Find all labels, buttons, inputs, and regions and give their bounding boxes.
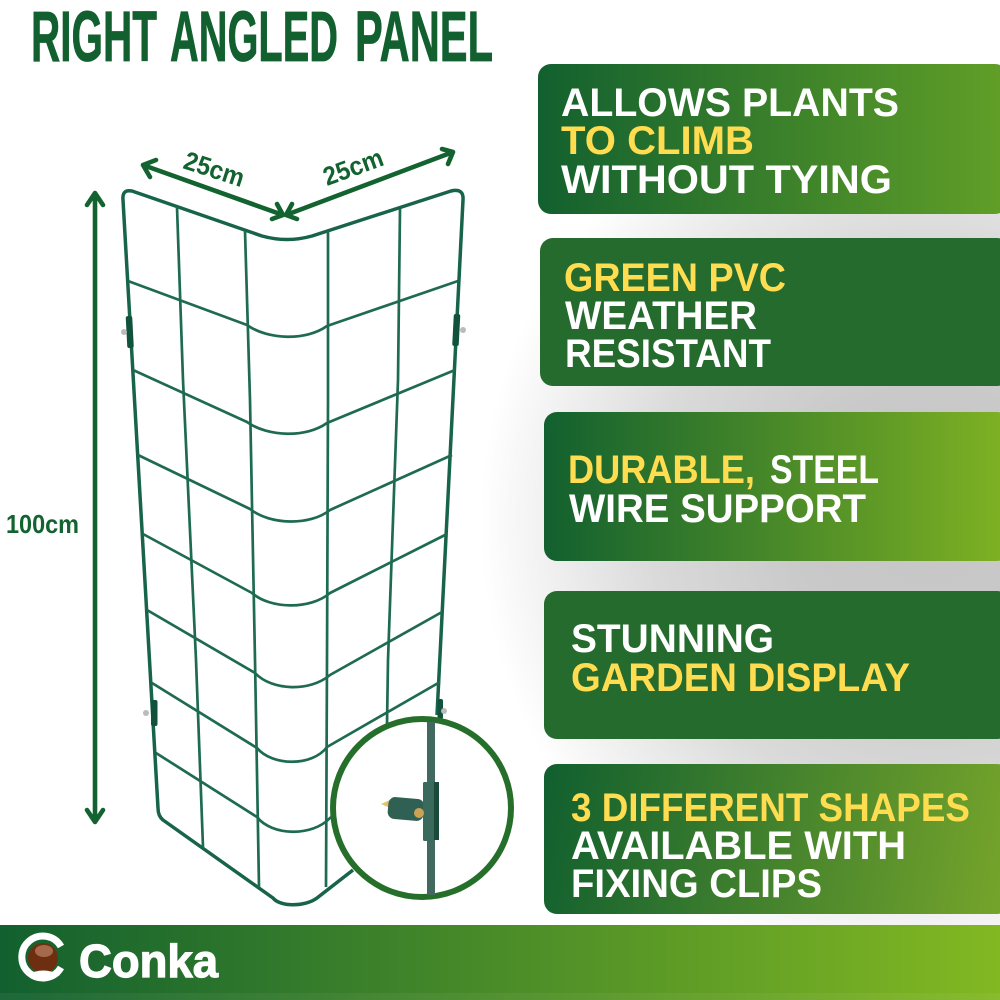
clip body xyxy=(423,782,439,841)
dimension: 25cm left xyxy=(143,145,283,219)
dimension: 100cm height: 100cm xyxy=(6,509,79,539)
panel: 3 different shapes: 3 DIFFERENT SHAPES xyxy=(571,786,970,830)
logo icon xyxy=(22,936,61,980)
title: ANGLED xyxy=(170,0,338,77)
panel: durable steel: STEEL xyxy=(770,448,879,492)
clip: lower left xyxy=(143,700,158,726)
panel: allows plants to climb: WITHOUT TYING xyxy=(561,158,892,202)
dimension: 25cm left: 25cm xyxy=(180,145,248,193)
footer band xyxy=(0,925,1000,1000)
panel: green pvc xyxy=(540,238,1000,386)
brass screw xyxy=(414,808,424,818)
dimension: 100cm height xyxy=(6,193,103,822)
title: PANEL xyxy=(355,0,493,77)
horizontal wires xyxy=(128,281,458,832)
panel: 3 different shapes xyxy=(544,764,1000,914)
panel: allows plants to climb: TO CLIMB xyxy=(561,119,754,163)
panel: green pvc: RESISTANT xyxy=(565,332,771,376)
vertical wires xyxy=(177,207,400,887)
clip: lower right xyxy=(438,699,447,719)
panel: stunning garden display xyxy=(544,591,1000,739)
outer frame xyxy=(123,190,463,905)
panel: durable steel xyxy=(544,412,1000,561)
clip: upper right xyxy=(452,314,466,346)
logo wordmark: Conka xyxy=(79,935,218,987)
panel: durable steel: DURABLE, xyxy=(568,448,755,492)
panel: green pvc: WEATHER xyxy=(565,294,757,338)
panel: 3 different shapes: FIXING CLIPS xyxy=(571,862,822,906)
panel: green pvc: GREEN PVC xyxy=(564,256,786,300)
clip: upper left xyxy=(121,316,134,348)
panel: stunning garden display: STUNNING xyxy=(571,617,774,661)
inset circle: clip close-up xyxy=(333,719,511,897)
wire trellis panel xyxy=(121,190,466,905)
panel: durable steel: WIRE SUPPORT xyxy=(569,487,866,531)
dimension: 25cm right: 25cm xyxy=(319,142,387,192)
dimension: 25cm right xyxy=(286,142,453,219)
panel: 3 different shapes: AVAILABLE WITH xyxy=(571,824,906,868)
brass tip xyxy=(381,800,390,808)
rod xyxy=(427,722,435,895)
horizontal cylinder xyxy=(387,796,425,822)
title xyxy=(31,0,493,77)
panel: allows plants to climb xyxy=(538,64,1000,214)
title: RIGHT xyxy=(31,0,157,77)
panel: allows plants to climb: ALLOWS PLANTS xyxy=(561,81,899,125)
panel: stunning garden display: GARDEN DISPLAY xyxy=(571,656,910,700)
